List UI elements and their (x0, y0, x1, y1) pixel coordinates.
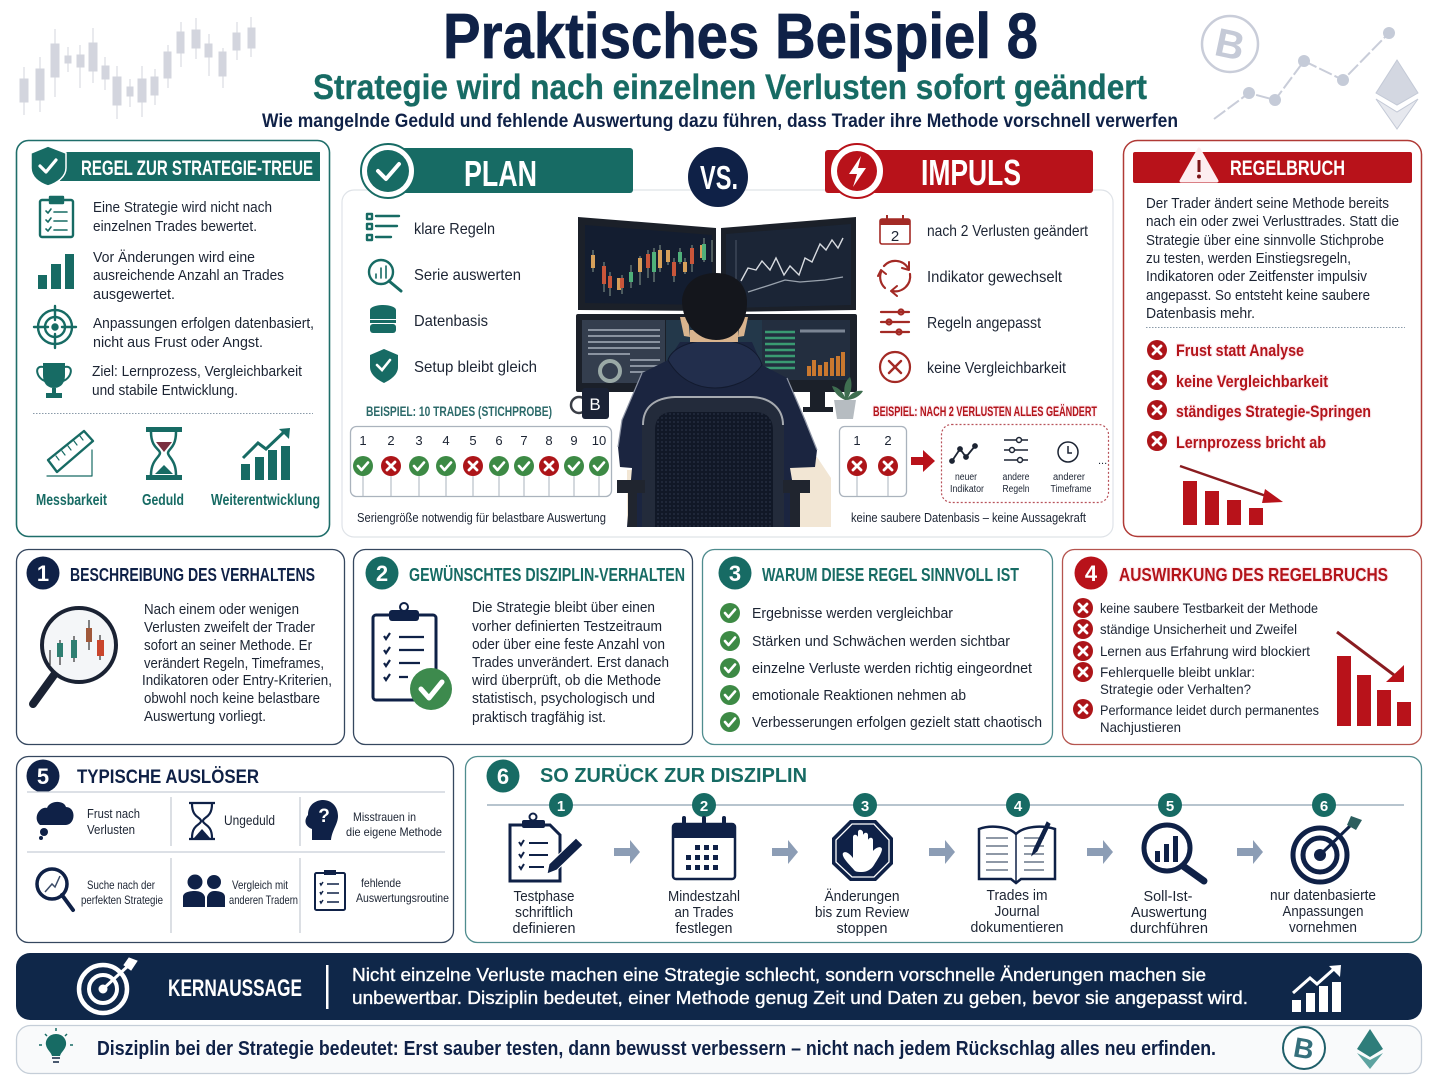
decoration: candlestick chart (20, 17, 255, 119)
trigger: Auswertungsroutine (315, 870, 449, 910)
step 4: dokumentieren (970, 920, 1064, 936)
step 5 (1130, 825, 1208, 937)
panel 3: Warum diese Regel sinnvoll ist: einzelne Verluste werden richtig eingeordnet (752, 660, 1033, 677)
head and hair (682, 273, 747, 340)
panel 4: Auswirkung des Regelbruchs: keine saubere Testbarkeit der Methode (1100, 600, 1318, 616)
icon: new indicator (950, 444, 977, 463)
step 1: schriftlich (515, 905, 573, 921)
trigger: perfekte Strategie: Suche nach der (87, 878, 155, 892)
icon: cross circle (880, 352, 910, 382)
trigger: Vergleich: anderen Tradern (229, 893, 298, 907)
panel 2: Gewünschtes Disziplin-Verhalten: 2 (376, 561, 388, 586)
panel 4: Auswirkung des Regelbruchs: Lernen aus Erfahrung wird blockiert (1100, 643, 1310, 659)
example: 10 trades: 9 (570, 433, 578, 448)
plan list: Datenbasis (414, 313, 488, 330)
rule text 3 (93, 315, 314, 351)
step numbers: 3 (861, 798, 869, 815)
example: 10 trades: 5 (469, 433, 477, 448)
icon: growth chart (241, 428, 290, 480)
consequences list: keine Vergleichbarkeit (1176, 372, 1328, 391)
step 6: vornehmen (1289, 920, 1357, 936)
falling chart (1337, 632, 1411, 726)
rule text 3: nicht aus Frust oder Angst. (93, 334, 263, 351)
step 2: festlegen (676, 921, 732, 937)
panel 6: So zurück zur Disziplin: 6 (497, 764, 509, 789)
step 1: definieren (512, 921, 576, 937)
panel 2: Gewünschtes Disziplin-Verhalten: Trades unverändert. Erst danach (472, 654, 669, 671)
icon: clipboard (373, 603, 452, 710)
consequences list: ständiges Strategie-Springen (1176, 402, 1371, 421)
impuls list: nach 2 Verlusten geändert (927, 223, 1088, 240)
plan list: Setup bleibt gleich (414, 359, 537, 376)
plan list: Serie auswerten (414, 267, 521, 284)
step 2 (668, 818, 740, 937)
step numbers (549, 793, 1336, 817)
rule text 4 (92, 363, 303, 399)
panel 1: Beschreibung: BESCHREIBUNG DES VERHALTENS (70, 565, 315, 585)
trigger: Frust: Verlusten (87, 823, 135, 837)
panel 1: Beschreibung: 1 (37, 561, 49, 586)
description text: zu testen, werden Einstiegsregeln, (1146, 250, 1351, 267)
plan list (367, 214, 537, 383)
impuls list (878, 215, 1088, 382)
rule text 1: einzelnen Trades bewertet. (93, 218, 257, 235)
panel 2: Gewünschtes Disziplin-Verhalten: wird überprüft, ob die Methode (471, 672, 661, 689)
desk (627, 457, 831, 527)
ears and neck (680, 317, 748, 342)
panel 2: Gewünschtes Disziplin-Verhalten: vorher definierten Testzeitraum (472, 618, 662, 635)
mug (571, 388, 609, 419)
panel 3: Warum diese Regel sinnvoll ist: Ergebnisse werden vergleichbar (752, 605, 953, 622)
example: after 2 losses: ... (1098, 455, 1107, 467)
labels (36, 492, 320, 509)
panel 4: Auswirkung des Regelbruchs: Fehlerquelle bleibt unklar: (1100, 664, 1255, 680)
rule text 1: Eine Strategie wird nicht nach (93, 199, 272, 216)
example: after 2 losses: 1 (853, 433, 861, 448)
icon: magnifier with candles (33, 608, 116, 704)
example: 10 trades: 3 (415, 433, 423, 448)
step 4 (970, 822, 1064, 936)
panel 1: Beschreibung: verändert Regeln, Timeframes, (144, 655, 324, 672)
step numbers: 2 (700, 798, 708, 815)
icon: trophy (37, 363, 71, 398)
Plan header (361, 144, 633, 198)
decoration: bitcoin, line chart and ethereum: B (1211, 20, 1248, 70)
panel: Regelbruch (1124, 140, 1422, 536)
consequences list: Frust statt Analyse (1176, 341, 1304, 360)
Impuls header (825, 144, 1093, 198)
example: 10 trades: 6 (495, 433, 503, 448)
example: after 2 losses: BEISPIEL: NACH 2 VERLUSTEN ALLES GEÄNDERT (873, 403, 1097, 419)
footer note (16, 1026, 1422, 1074)
rule text 1 (93, 199, 272, 235)
step numbers: 6 (1320, 798, 1328, 815)
VS badge (688, 147, 748, 207)
labels: Weiterentwicklung (211, 492, 320, 509)
Plan header: PLAN (464, 153, 537, 194)
panel 2: Gewünschtes Disziplin-Verhalten (354, 550, 692, 744)
trigger: Frust (37, 802, 140, 840)
example: after 2 losses: keine saubere Datenbasis – keine Aussagekraft (851, 510, 1086, 525)
step 6: nur datenbasierte (1270, 888, 1376, 904)
rule text 2 (93, 249, 284, 303)
rule text 2: ausreichende Anzahl an Trades (93, 267, 284, 284)
description text (1146, 195, 1399, 322)
banner: Kernaussage: Nicht einzelne Verluste machen eine Strategie schlecht, sondern vorschnelle Änderungen machen sie (352, 964, 1206, 985)
icon: other rules (1004, 438, 1028, 462)
panel 1: Beschreibung: Indikatoren oder Entry-Kriterien, (142, 672, 332, 689)
consequences list (1147, 340, 1371, 452)
icon: calendar: 2 (891, 228, 899, 245)
rule text 4: und stabile Entwicklung. (92, 382, 238, 399)
icon: sliders (881, 310, 909, 334)
impuls list: Indikator gewechselt (927, 269, 1063, 286)
panel 1: Beschreibung: obwohl noch keine belastbare (144, 690, 320, 707)
step 6 (1270, 816, 1376, 936)
panel 4: Auswirkung des Regelbruchs (1062, 550, 1422, 744)
trigger: Vergleich: Vergleich mit (232, 878, 289, 892)
example: 10 trades: BEISPIEL: 10 TRADES (STICHPROBE) (366, 403, 552, 419)
rule text 2: ausgewertet. (93, 286, 175, 303)
monitor top left (578, 217, 716, 311)
panel: Plan vs Impuls comparison (342, 144, 1113, 537)
panel 4: Auswirkung des Regelbruchs: AUSWIRKUNG DES REGELBRUCHS (1119, 565, 1388, 585)
step 2: an Trades (674, 905, 734, 921)
panel 3: Warum diese Regel sinnvoll ist: 3 (729, 561, 741, 586)
step 5: Auswertung (1131, 905, 1207, 921)
impuls list: keine Vergleichbarkeit (927, 360, 1066, 377)
description text: Datenbasis mehr. (1146, 305, 1255, 322)
trigger: Misstrauen: die eigene Methode (346, 825, 442, 839)
VS badge: VS. (700, 159, 738, 196)
monitor top right (721, 217, 856, 312)
panel 3: Warum diese Regel sinnvoll ist: Verbesserungen erfolgen gezielt statt chaotisch (752, 714, 1042, 731)
rule text 3: Anpassungen erfolgen datenbasiert, (93, 315, 314, 332)
banner: Kernaussage: unbewertbar. Disziplin bedeutet, einer Methode genug Zeit und Daten zu geben, bevor sie angepasst wird. (352, 987, 1248, 1008)
panel 5: Typische Auslöser: 5 (37, 764, 49, 789)
labels: Geduld (142, 492, 184, 509)
icon: target (79, 958, 137, 1013)
banner: Kernaussage: KERNAUSSAGE (168, 975, 302, 1002)
step 1: Testphase (514, 889, 574, 905)
panel 4: Auswirkung des Regelbruchs: ständige Unsicherheit und Zweifel (1100, 621, 1297, 637)
description text: Indikatoren oder Zeitfenster impulsiv (1146, 268, 1367, 285)
panel: Regel zur Strategie-Treue (16, 140, 330, 536)
example: after 2 losses: 2 (884, 433, 892, 448)
example: 10 trades (350, 403, 612, 525)
description text: nach ein oder zwei Verlusttrades. Statt die (1146, 213, 1399, 230)
example: after 2 losses: anderer (1053, 472, 1086, 483)
icon: crosshair (34, 306, 76, 348)
hoodie (618, 342, 817, 527)
decoration: bitcoin, line chart and ethereum (1202, 16, 1418, 129)
icon: list (367, 214, 399, 240)
consequences list: Lernprozess bricht ab (1176, 433, 1326, 452)
step 1 (510, 814, 583, 937)
example: 10 trades: 10 (592, 433, 606, 448)
panel 2: Gewünschtes Disziplin-Verhalten: Die Strategie bleibt über einen (472, 599, 655, 616)
panel 5: Typische Auslöser: TYPISCHE AUSLÖSER (77, 767, 259, 788)
trigger: Ungeduld: Ungeduld (224, 813, 275, 828)
panel 3: Warum diese Regel sinnvoll ist (702, 550, 1052, 744)
panel 3: Warum diese Regel sinnvoll ist: Stärken und Schwächen werden sichtbar (752, 633, 1010, 650)
example: 10 trades: 7 (520, 433, 528, 448)
icon: calendar (880, 215, 910, 245)
icon: bitcoin (1283, 1027, 1325, 1069)
trigger: perfekte Strategie: perfekten Strategie (81, 893, 163, 907)
step numbers: 5 (1166, 798, 1174, 815)
labels: Messbarkeit (36, 492, 108, 509)
icon: checklist (40, 197, 73, 237)
trigger: Vergleich (183, 874, 298, 907)
trigger: Frust: Frust nach (87, 807, 140, 821)
rule text 4: Ziel: Lernprozess, Vergleichbarkeit (92, 363, 303, 380)
step 5: durchführen (1130, 921, 1208, 937)
description text: Der Trader ändert seine Methode bereits (1146, 195, 1389, 212)
footer note: Disziplin bei der Strategie bedeutet: Erst sauber testen, dann bewusst verbessern – nicht nach jedem Rückschlag alles neu erfinden. (97, 1038, 1216, 1060)
impuls list: Regeln angepasst (927, 315, 1041, 332)
header band (31, 146, 320, 186)
plant (832, 377, 863, 419)
step 3: bis zum Review (815, 905, 909, 921)
Impuls header: IMPULS (921, 152, 1021, 193)
example: after 2 losses: Timeframe (1050, 484, 1092, 495)
example: after 2 losses: andere (1002, 472, 1030, 483)
panel 1: Beschreibung: Auswertung vorliegt. (144, 708, 266, 725)
falling chart (1180, 466, 1283, 525)
panel 2: Gewünschtes Disziplin-Verhalten: oder über eine feste Anzahl von (472, 636, 665, 653)
panel 5: Typische Auslöser (16, 756, 454, 942)
icon: bars (38, 254, 74, 289)
icon: ruler (47, 431, 93, 476)
panel 3: Warum diese Regel sinnvoll ist: emotionale Reaktionen nehmen ab (752, 687, 966, 704)
header band: REGEL ZUR STRATEGIE-TREUE (81, 157, 313, 180)
header band: REGELBRUCH (1230, 157, 1345, 180)
step 3 (815, 820, 909, 937)
chair (617, 396, 810, 527)
hood (668, 340, 762, 388)
icon: shield (370, 349, 398, 383)
illustration: trader at monitors (571, 217, 863, 527)
step 4: Journal (994, 904, 1040, 920)
header band (1133, 149, 1412, 183)
example: after 2 losses (840, 403, 1108, 525)
subtitle: Strategie wird nach einzelnen Verlusten sofort geändert (313, 68, 1147, 107)
panel 3: Warum diese Regel sinnvoll ist: WARUM DIESE REGEL SINNVOLL IST (762, 565, 1019, 585)
icon: bitcoin: B (1291, 1031, 1317, 1066)
panel 4: Auswirkung des Regelbruchs: 4 (1085, 561, 1098, 586)
panel 2: Gewünschtes Disziplin-Verhalten: GEWÜNSCHTES DISZIPLIN-VERHALTEN (409, 565, 685, 585)
rule text 2: Vor Änderungen wird eine (93, 249, 255, 266)
icon: growth chart (1292, 965, 1341, 1012)
example: after 2 losses: neuer (955, 472, 978, 483)
step 3: stoppen (836, 921, 888, 937)
arrows (614, 840, 1263, 864)
panel 1: Beschreibung: sofort an seiner Methode. Er (144, 637, 312, 654)
trigger: Ungeduld (189, 803, 275, 839)
icon: hourglass (146, 427, 182, 480)
example: after 2 losses: Indikator (950, 484, 985, 495)
mug: B (589, 395, 601, 414)
panel 2: Gewünschtes Disziplin-Verhalten: praktisch tragfähig ist. (472, 709, 606, 726)
title: Praktisches Beispiel 8 (443, 0, 1038, 72)
example: 10 trades: 4 (442, 433, 450, 448)
monitor bottom (576, 314, 857, 392)
trigger: perfekte Strategie (37, 869, 163, 910)
trigger: Misstrauen: ? (318, 806, 330, 827)
trigger: Auswertungsroutine: fehlende (361, 876, 401, 890)
panel 6: So zurück zur Disziplin: SO ZURÜCK ZUR DISZIPLIN (540, 764, 807, 787)
example: 10 trades: 8 (545, 433, 553, 448)
panel 1: Beschreibung: Nach einem oder wenigen (144, 601, 299, 618)
icon: ethereum (1357, 1029, 1383, 1069)
trigger: Misstrauen (306, 800, 442, 840)
example: 10 trades: Seriengröße notwendig für belastbare Auswertung (357, 510, 606, 525)
example: 10 trades: 1 (359, 433, 367, 448)
panel 1: Beschreibung: Verlusten zweifelt der Trader (144, 619, 315, 636)
panel 4: Auswirkung des Regelbruchs: Nachjustieren (1100, 719, 1181, 735)
icon: light bulb (39, 1028, 73, 1062)
icon: cycle (878, 261, 910, 296)
icon: database (370, 305, 396, 333)
icon: clock (1058, 442, 1078, 462)
panel 4: Auswirkung des Regelbruchs: Performance leidet durch permanentes (1100, 702, 1319, 718)
example: 10 trades: 2 (387, 433, 395, 448)
step 3: Änderungen (824, 888, 900, 905)
trigger: Auswertungsroutine: Auswertungsroutine (356, 891, 449, 905)
panel 6: So zurück zur Disziplin (466, 756, 1422, 942)
step 2: Mindestzahl (668, 889, 740, 905)
panel 2: Gewünschtes Disziplin-Verhalten: statistisch, psychologisch und (472, 690, 655, 707)
step 6: Anpassungen (1282, 904, 1364, 920)
description text: Strategie über eine sinnvolle Stichprobe (1146, 232, 1384, 249)
icon: magnifier (369, 260, 401, 291)
step numbers: 1 (557, 798, 565, 815)
arrow (911, 450, 935, 472)
step 4: Trades im (986, 888, 1048, 904)
example: after 2 losses: Regeln (1002, 484, 1030, 495)
panel 1: Beschreibung (16, 550, 344, 744)
step numbers: 4 (1014, 798, 1023, 815)
banner: Kernaussage (16, 953, 1422, 1020)
step 5: Soll-Ist- (1144, 889, 1193, 905)
trigger: Misstrauen: Misstrauen in (353, 810, 416, 824)
monitor stand (803, 392, 833, 412)
description text: angepasst. So entsteht keine saubere (1146, 287, 1370, 304)
plan list: klare Regeln (414, 221, 495, 238)
tagline: Wie mangelnde Geduld und fehlende Auswertung dazu führen, dass Trader ihre Methode vorschnell verwerfen (262, 111, 1178, 132)
panel 4: Auswirkung des Regelbruchs: Strategie oder Verhalten? (1100, 681, 1251, 697)
